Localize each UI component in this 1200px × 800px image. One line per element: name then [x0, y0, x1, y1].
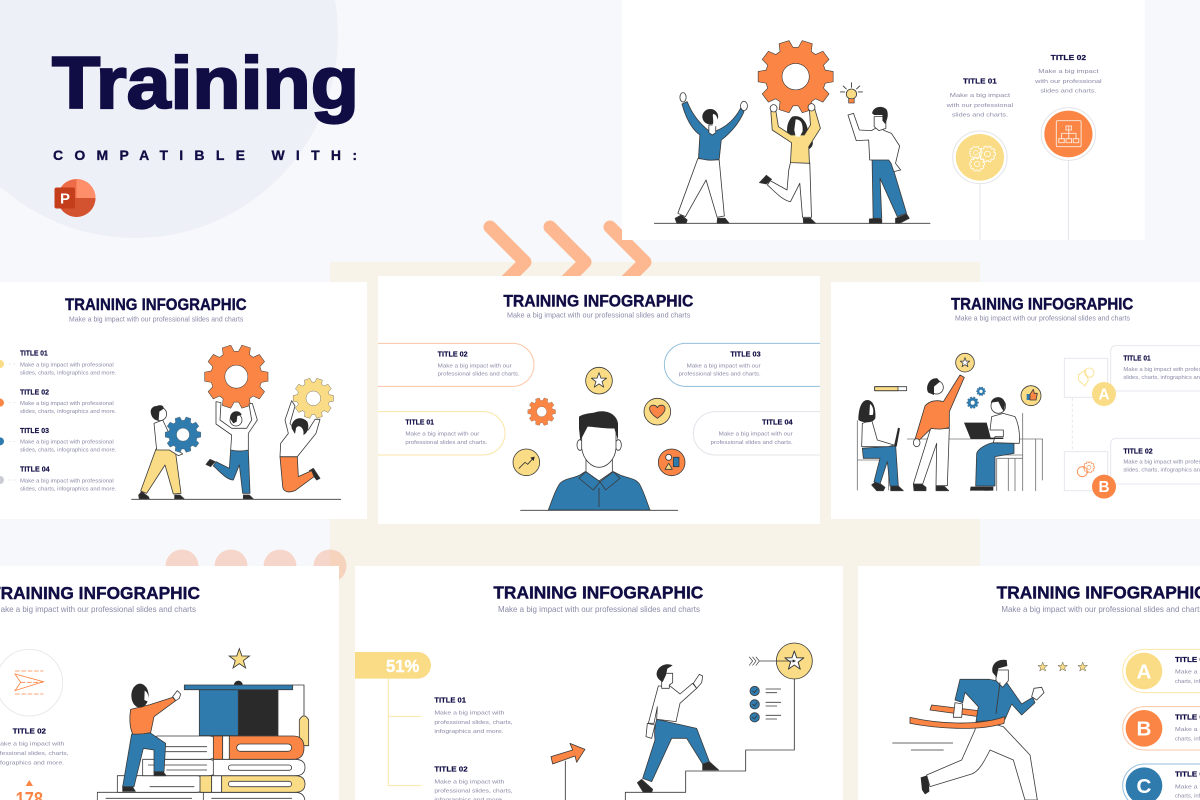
card A [1064, 346, 1200, 406]
callout: title 01: Make a big impact [950, 93, 1011, 99]
illustration: man portrait [521, 411, 678, 510]
text: title 02: Make a big impact with [434, 779, 504, 785]
pill B [1123, 707, 1200, 750]
pill: title 03 [664, 343, 825, 386]
person: blue shirt [675, 93, 747, 223]
pill: title 02 [375, 343, 534, 386]
pill: title 03: professional slides and charts. [679, 372, 761, 378]
icon: light bulb [840, 83, 862, 103]
person climbing stairs [637, 664, 719, 792]
gear: orange [205, 345, 268, 408]
callout: title 01 [945, 76, 1013, 240]
pill: title 04: professional slides and charts. [711, 440, 793, 446]
callout: title 02 [1034, 53, 1102, 240]
text: title 01: infographics and more. [434, 729, 504, 735]
pill: title 03: Make a big impact with our [687, 363, 761, 369]
pill: title 01: professional slides and charts. [405, 440, 487, 446]
panel: bottom-left slide books [0, 566, 339, 800]
illustration: team at a table [857, 353, 1043, 491]
main title: Training [52, 43, 359, 124]
callout: title 01: with our professional [945, 103, 1013, 109]
person: blue trousers [206, 402, 257, 499]
illustration: three people lifting a gear [654, 41, 930, 223]
panel: left slide gears list [0, 282, 367, 519]
list item 03: TITLE 03 [20, 426, 49, 435]
card A: A [1098, 386, 1110, 403]
pill C: C [1137, 775, 1152, 798]
text: title 01 [434, 696, 513, 735]
pill: title 03: TITLE 03 [730, 350, 761, 359]
icon: gear badge [528, 398, 556, 425]
text: title 01: Make a big impact with [434, 711, 504, 717]
icon: PowerPoint logo [54, 179, 96, 217]
icon: growth chart badge [513, 449, 540, 476]
pill: title 02: Make a big impact with our [438, 363, 512, 369]
callout: title 02: with our professional [1034, 79, 1102, 85]
list item 02: TITLE 02 [20, 387, 49, 396]
percent pill: 51% [386, 656, 419, 676]
metric: title 02 [0, 649, 68, 800]
tree connector [388, 679, 421, 786]
checklist [750, 686, 781, 722]
pill: title 04: TITLE 04 [762, 418, 794, 427]
subheading: Make a big impact with our professional slides and charts [0, 604, 196, 614]
callout: title 02: slides and charts. [1040, 89, 1097, 95]
icon: heart badge [644, 398, 671, 425]
pill: title 02: TITLE 02 [438, 350, 468, 359]
list item 03 [0, 426, 116, 454]
text: title 02: TITLE 02 [434, 764, 468, 773]
stairs [625, 678, 794, 800]
small gear two [976, 387, 986, 396]
text: title 02: professional slides, charts, [434, 789, 513, 795]
decorative dots row [166, 550, 346, 582]
list item 02: Make a big impact with professional [20, 401, 114, 407]
person: yellow trousers with blue gear [139, 405, 201, 499]
panel: centre slide head with icons [375, 276, 825, 524]
illustration: books and graduation cap [97, 649, 309, 800]
card B: TITLE 02 [1123, 446, 1153, 455]
list item 01: TITLE 01 [20, 349, 48, 358]
person: yellow shirt [759, 104, 820, 223]
card A: TITLE 01 [1123, 353, 1151, 362]
panel: bottom-right slide runner [858, 566, 1200, 800]
seated man with laptop [964, 397, 1023, 491]
heading: TRAINING INFOGRAPHIC [503, 292, 693, 311]
list item 03: Make a big impact with professional [20, 440, 114, 446]
text: title 01: TITLE 01 [434, 696, 466, 705]
callout: title 02: TITLE 02 [1051, 53, 1086, 62]
star [229, 649, 249, 668]
person climbing books [123, 684, 181, 791]
text: title 01: professional slides, charts, [434, 720, 513, 726]
list item 03: slides, charts, infographics and more. [20, 448, 116, 454]
pill: title 02: professional slides and charts. [438, 372, 520, 378]
panel: right slide team at desk [831, 282, 1200, 519]
pill: title 01: Make a big impact with our [405, 432, 480, 438]
list item 02 [0, 387, 116, 415]
decorative circle top-left [0, 0, 338, 238]
book stack [97, 736, 305, 800]
text: title 02 [434, 764, 513, 800]
chevron arrows [490, 227, 645, 297]
pill B: B [1137, 718, 1151, 741]
compatible with label: COMPATIBLE WITH: [53, 147, 357, 163]
person: orange trousers [280, 401, 320, 492]
panel: bottom-centre slide stairs [355, 566, 843, 800]
standing man [913, 353, 974, 491]
pill A [1123, 649, 1200, 693]
icon: star badge [586, 367, 612, 394]
list item 01: slides, charts, infographics and more. [20, 370, 116, 376]
card B [1064, 438, 1200, 499]
heading: TRAINING INFOGRAPHIC [951, 295, 1133, 314]
list item 04 [0, 465, 116, 492]
list item 04: Make a big impact with professional [20, 478, 114, 484]
ground line [654, 222, 930, 224]
arrow on post [551, 743, 585, 800]
pill: title 04 [693, 412, 825, 455]
list item 01: Make a big impact with professional [20, 362, 114, 368]
callout: title 02: Make a big impact [1038, 69, 1099, 75]
subheading: Make a big impact with our professional slides and charts [69, 314, 243, 323]
icon: shapes badge [658, 449, 685, 476]
gear: yellow [293, 378, 333, 418]
illustration: people holding gears [132, 345, 341, 499]
gear [758, 41, 833, 113]
list item 01 [0, 349, 116, 376]
pill: title 01 [375, 412, 505, 455]
subheading: Make a big impact with our professional slides and charts [507, 310, 690, 319]
pill A: A [1137, 660, 1152, 683]
progress bar [875, 387, 907, 391]
subheading: Make a big impact with our professional slides and charts [498, 604, 700, 614]
graduation cap [184, 681, 309, 746]
callout: title 01: slides and charts. [952, 113, 1009, 119]
connector dashes [1071, 398, 1074, 452]
list item 04: TITLE 04 [20, 465, 51, 474]
icon: PowerPoint logo: P [60, 190, 70, 208]
percent pill [355, 652, 431, 679]
speed lines [893, 743, 953, 750]
thumbs up badge [1021, 386, 1041, 406]
illustration: runner at finish ribbon [910, 660, 1044, 800]
list item 02: slides, charts, infographics and more. [20, 409, 116, 415]
heading: TRAINING INFOGRAPHIC [493, 582, 704, 602]
cream backdrop panel [330, 262, 980, 800]
small gears [967, 397, 979, 409]
pill C [1123, 764, 1200, 800]
card B: B [1098, 479, 1110, 496]
metric: title 02: TITLE 02 [13, 727, 46, 736]
seated woman [857, 400, 903, 491]
target with arrow [749, 643, 812, 679]
panel: top slide people with gear [622, 40, 1102, 240]
person: pointing up [848, 107, 909, 223]
pill: title 04: Make a big impact with our [719, 432, 793, 438]
callout: title 01: TITLE 01 [963, 76, 997, 85]
stars [1038, 662, 1087, 671]
table [907, 439, 1043, 491]
list item 04: slides, charts, infographics and more. [20, 486, 116, 492]
subheading: Make a big impact with our professional slides and charts [955, 314, 1130, 323]
heading: TRAINING INFOGRAPHIC [65, 295, 247, 314]
pill: title 01: TITLE 01 [405, 418, 434, 427]
